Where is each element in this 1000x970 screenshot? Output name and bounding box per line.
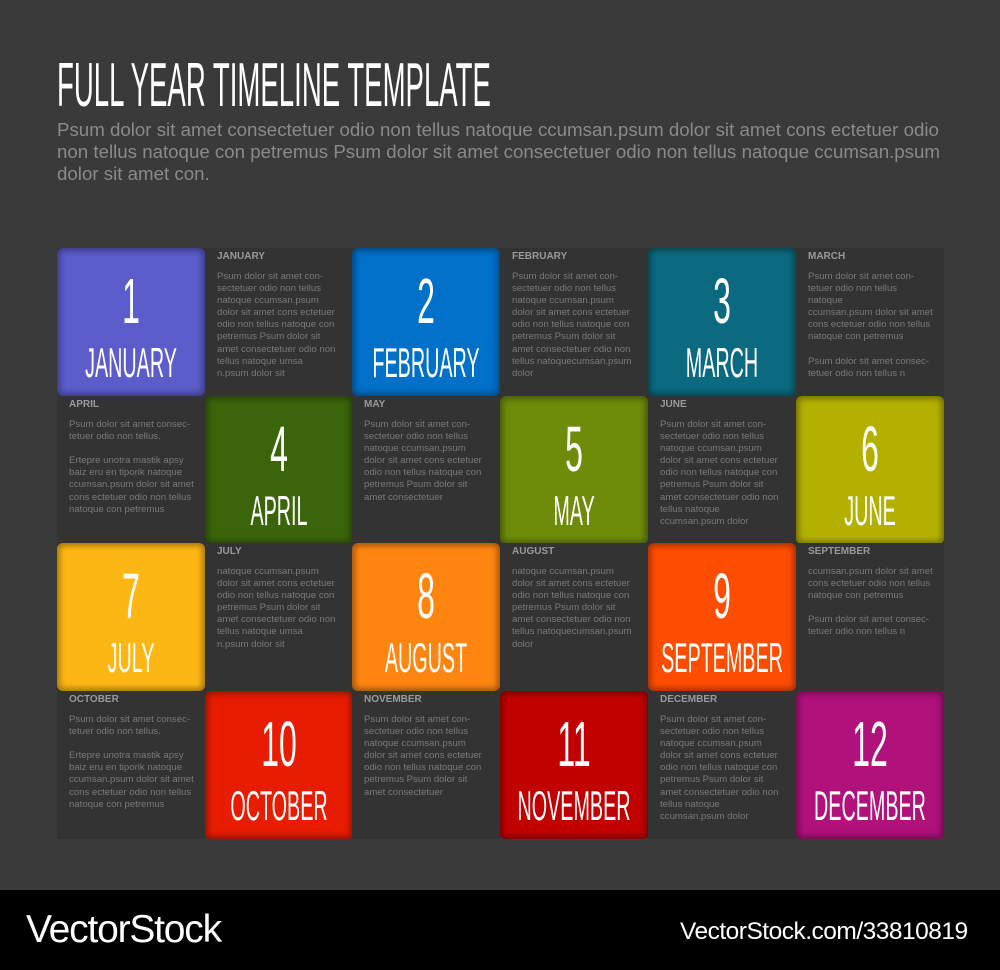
text: August [500, 543, 648, 691]
text: May: MAY [364, 399, 385, 410]
tile: August: 8 [417, 560, 435, 632]
text: March: natoque con petremus [808, 331, 903, 342]
text: December: petremus Psum dolor sit [660, 774, 763, 785]
text: June: sectetuer odio non tellus [660, 431, 764, 442]
tile: May: 5 [565, 413, 583, 485]
text: October: baiz eru en tiporik natoque [69, 762, 182, 773]
tile: January [57, 248, 205, 396]
tile: June: JUNE [844, 487, 896, 534]
text: August: petremus Psum dolor sit [512, 602, 615, 613]
text: September [796, 543, 944, 691]
text: June: tellus natoque [660, 504, 720, 515]
text: December: dolor sit amet cons ectetuer [660, 750, 778, 761]
text: August: odio non tellus natoque con [512, 590, 629, 601]
text: October: ccumsan.psum dolor sit amet [69, 774, 194, 785]
tile: December [796, 691, 944, 839]
text: November: sectetuer odio non tellus [364, 726, 468, 737]
text: January: odio non tellus natoque con [217, 319, 334, 330]
text: November: odio non tellus natoque con [364, 762, 481, 773]
tile: July: 7 [122, 560, 140, 632]
tile: July [57, 543, 205, 691]
tile: May: MAY [553, 487, 595, 534]
tile: October: OCTOBER [230, 782, 328, 829]
text: January: tellus natoque umsa [217, 356, 303, 367]
text: September: ccumsan.psum dolor sit amet [808, 566, 933, 577]
text: August: natoque ccumsan.psum [512, 566, 614, 577]
footer bar [0, 890, 1000, 970]
tile: September: 9 [713, 560, 731, 632]
text: November: amet consectetuer [364, 787, 443, 798]
text: April: natoque con petremus [69, 504, 164, 515]
text: November: natoque ccumsan.psum [364, 738, 466, 749]
text: December: tellus natoque [660, 799, 720, 810]
text: July: amet consectetuer odio non [217, 614, 335, 625]
tile: April: 4 [270, 413, 288, 485]
text: July: natoque ccumsan.psum [217, 566, 319, 577]
text: July: tellus natoque umsa [217, 626, 303, 637]
tile: January: 1 [122, 265, 140, 337]
tile: March: MARCH [686, 339, 758, 386]
text: November: dolor sit amet cons ectetuer [364, 750, 482, 761]
text: September: SEPTEMBER [808, 546, 870, 557]
text: September: cons ectetuer odio non tellus [808, 578, 930, 589]
text: September: natoque con petremus [808, 590, 903, 601]
intro paragraph [57, 119, 940, 184]
text: February: dolor sit amet cons ectetuer [512, 307, 630, 318]
intro paragraph: Psum dolor sit amet consectetuer odio non tellus natoque ccumsan.psum dolor sit amet cons ectetuer odio [57, 119, 939, 140]
text: September: Psum dolor sit amet consec- [808, 614, 929, 625]
text: June: amet consectetuer odio non [660, 492, 778, 503]
text: December: amet consectetuer odio non [660, 787, 778, 798]
text: October: Ertepre unotra mastik apsy [69, 750, 184, 761]
tile: April [205, 396, 353, 544]
text: December: DECEMBER [660, 694, 717, 705]
text: April: APRIL [69, 399, 99, 410]
text: August: tellus natoquecumsan.psum [512, 626, 631, 637]
footer url: VectorStock.com/33810819 [680, 918, 968, 945]
text: October: cons ectetuer odio non tellus [69, 787, 191, 798]
tile: September: SEPTEMBER [661, 634, 783, 681]
text: May: amet consectetuer [364, 492, 443, 503]
text: February: natoque ccumsan.psum [512, 295, 614, 306]
tile: February: 2 [417, 265, 435, 337]
tile: September [648, 543, 796, 691]
text: May: dolor sit amet cons ectetuer [364, 455, 482, 466]
tile: March: 3 [713, 265, 731, 337]
text: February: odio non tellus natoque con [512, 319, 629, 330]
text: June: Psum dolor sit amet con- [660, 419, 766, 430]
text: August: amet consectetuer odio non [512, 614, 630, 625]
text: February: sectetuer odio non tellus [512, 283, 616, 294]
text: April [57, 396, 205, 544]
text: October [57, 691, 205, 839]
tile: October [205, 691, 353, 839]
text: July: odio non tellus natoque con [217, 590, 334, 601]
text: January: natoque ccumsan.psum [217, 295, 319, 306]
title: FULL YEAR TIMELINE TEMPLATE [57, 51, 491, 120]
text: August: AUGUST [512, 546, 554, 557]
text: July: dolor sit amet cons ectetuer [217, 578, 335, 589]
text: April: baiz eru en tiporik natoque [69, 467, 182, 478]
text: October: Psum dolor sit amet consec- [69, 714, 190, 725]
tile: August [352, 543, 500, 691]
text: May: petremus Psum dolor sit [364, 479, 467, 490]
tile: May [500, 396, 648, 544]
text: January: JANUARY [217, 251, 265, 262]
intro paragraph: dolor sit amet con. [57, 163, 210, 184]
text: February: amet consectetuer odio non [512, 344, 630, 355]
text: June: petremus Psum dolor sit [660, 479, 763, 490]
text: January: dolor sit amet cons ectetuer [217, 307, 335, 318]
text: March: Psum dolor sit amet consec- [808, 356, 929, 367]
text: May: Psum dolor sit amet con- [364, 419, 470, 430]
text: December: ccumsan.psum dolor [660, 811, 749, 822]
text: October: tetuer odio non tellus. [69, 726, 161, 737]
text: February: dolor [512, 368, 533, 379]
tile: December: DECEMBER [814, 782, 926, 829]
text: July: n.psum dolor sit [217, 639, 285, 650]
text: April: Ertepre unotra mastik apsy [69, 455, 184, 466]
text: June: JUNE [660, 399, 687, 410]
text: September: tetuer odio non tellus n [808, 626, 905, 637]
tile: August: AUGUST [385, 634, 467, 681]
text: March: tetuer odio non tellus natoque [808, 283, 897, 306]
tile: April: APRIL [250, 487, 308, 534]
footer logo: VectorStock [26, 908, 221, 951]
text: February: petremus Psum dolor sit [512, 331, 615, 342]
text: June: odio non tellus natoque con [660, 467, 777, 478]
text: November: NOVEMBER [364, 694, 422, 705]
text: January [205, 248, 353, 396]
text: June: dolor sit amet cons ectetuer [660, 455, 778, 466]
text: January: petremus Psum dolor sit [217, 331, 320, 342]
text: March: cons ectetuer odio non tellus [808, 319, 930, 330]
text: March: Psum dolor sit amet con- [808, 271, 914, 282]
text: August: dolor [512, 639, 533, 650]
text: October: natoque con petremus [69, 799, 164, 810]
text: November: Psum dolor sit amet con- [364, 714, 470, 725]
text: October: OCTOBER [69, 694, 119, 705]
text: March: MARCH [808, 251, 845, 262]
text: August: dolor sit amet cons ectetuer [512, 578, 630, 589]
text: May [352, 396, 500, 544]
text: May: odio non tellus natoque con [364, 467, 481, 478]
text: June: natoque ccumsan.psum [660, 443, 762, 454]
tile: June: 6 [861, 413, 879, 485]
text: February: tellus natoquecumsan.psum [512, 356, 631, 367]
text: December: Psum dolor sit amet con- [660, 714, 766, 725]
tile: November: 11 [557, 708, 591, 780]
text: November [352, 691, 500, 839]
intro paragraph: non tellus natoque con petremus Psum dolor sit amet consectetuer odio non tellus natoque ccumsan.psum [57, 141, 940, 162]
text: May: sectetuer odio non tellus [364, 431, 468, 442]
text: January: sectetuer odio non tellus [217, 283, 321, 294]
text: April: ccumsan.psum dolor sit amet [69, 479, 194, 490]
tile: February: FEBRUARY [372, 339, 480, 386]
text: June: ccumsan.psum dolor [660, 516, 749, 527]
text: April: Psum dolor sit amet consec- [69, 419, 190, 430]
text: July: JULY [217, 546, 242, 557]
text: March [796, 248, 944, 396]
tile: July: JULY [108, 634, 154, 681]
text: December [648, 691, 796, 839]
tile: October: 10 [261, 708, 297, 780]
text: May: natoque ccumsan.psum [364, 443, 466, 454]
text: February [500, 248, 648, 396]
text: July: petremus Psum dolor sit [217, 602, 320, 613]
text: March: tetuer odio non tellus n [808, 368, 905, 379]
text: December: natoque ccumsan.psum [660, 738, 762, 749]
tile: February [352, 248, 500, 396]
text: February: Psum dolor sit amet con- [512, 271, 618, 282]
tile: January: JANUARY [85, 339, 177, 386]
text: February: FEBRUARY [512, 251, 567, 262]
text: December: sectetuer odio non tellus [660, 726, 764, 737]
grid [57, 248, 943, 838]
tile: December: 12 [852, 708, 888, 780]
text: November: petremus Psum dolor sit [364, 774, 467, 785]
tile: June [796, 396, 944, 544]
text: March: ccumsan.psum dolor sit amet [808, 307, 933, 318]
text: January: amet consectetuer odio non [217, 344, 335, 355]
tile: November: NOVEMBER [518, 782, 630, 829]
text: June [648, 396, 796, 544]
text: January: n.psum dolor sit [217, 368, 285, 379]
text: December: odio non tellus natoque con [660, 762, 777, 773]
text: April: tetuer odio non tellus. [69, 431, 161, 442]
text: July [205, 543, 353, 691]
text: April: cons ectetuer odio non tellus [69, 492, 191, 503]
tile: November [500, 691, 648, 839]
text: January: Psum dolor sit amet con- [217, 271, 323, 282]
tile: March [648, 248, 796, 396]
